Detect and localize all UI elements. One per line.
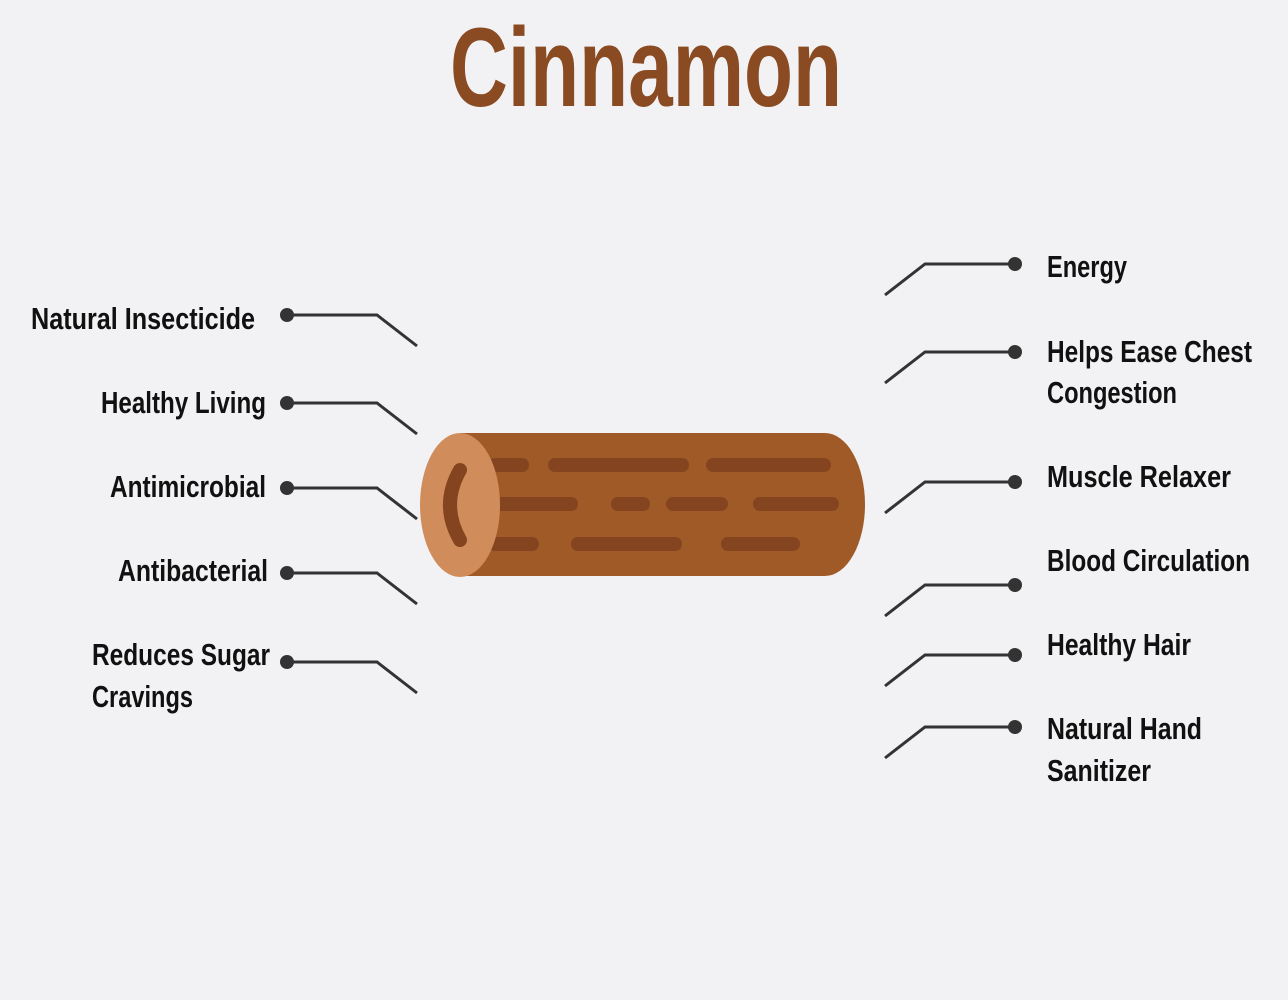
left labels: Antibacterial	[118, 553, 268, 588]
right labels: Congestion	[1047, 375, 1177, 410]
left labels: Healthy Living	[101, 385, 266, 420]
callout connector lines	[287, 264, 1015, 758]
left labels	[31, 301, 270, 714]
right labels: Energy	[1047, 249, 1128, 284]
right labels: Natural Hand	[1047, 711, 1202, 746]
right labels: Muscle Relaxer	[1047, 459, 1231, 494]
left labels: Antimicrobial	[110, 469, 266, 504]
left labels: Natural Insecticide	[31, 301, 255, 336]
right labels	[1047, 249, 1252, 788]
left labels: Cravings	[92, 679, 193, 714]
right labels: Healthy Hair	[1047, 627, 1191, 662]
left labels: Reduces Sugar	[92, 637, 270, 672]
right labels: Sanitizer	[1047, 753, 1151, 788]
icon: cinnamon stick	[420, 433, 865, 577]
title: Cinnamon	[450, 5, 842, 130]
callout dots	[280, 257, 1022, 734]
